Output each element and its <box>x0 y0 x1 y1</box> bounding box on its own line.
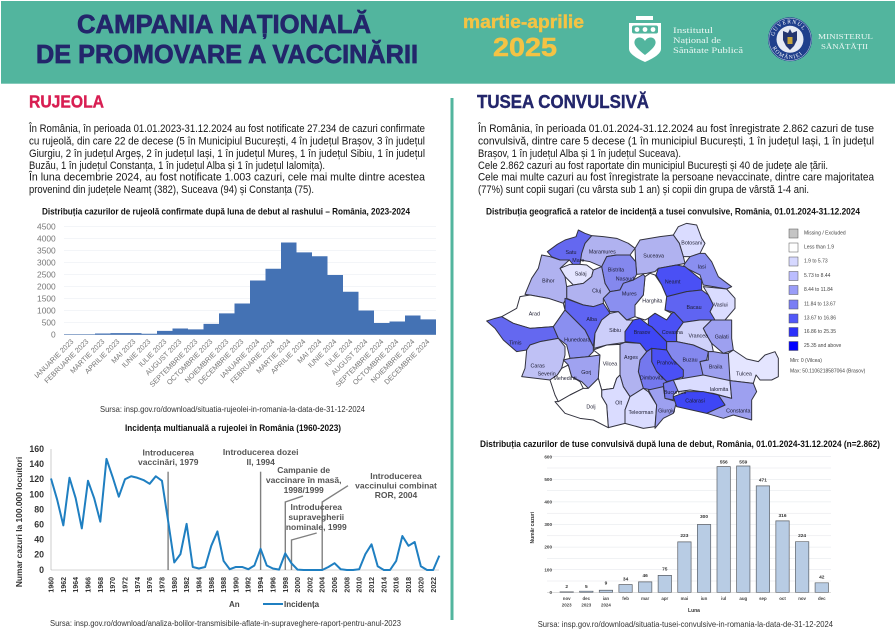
area chart: monthly measles cases: OCTOMBRIE 2024 <box>351 337 400 387</box>
line chart: multiannual incidence: 1970 <box>110 577 117 593</box>
choropleth map of Romania: Dolj <box>586 404 596 410</box>
line chart: multiannual incidence: 2000 <box>295 577 302 593</box>
logo: Institutul Național de Sănătate Publică: Sănătate Publică <box>673 46 744 55</box>
source: line chart: Sursa: insp.gov.ro/download/analiza-bolilor-transmisibile-aflate-in-supraveghere-raport-pentru-anul-2023 <box>50 618 401 628</box>
line chart: multiannual incidence <box>14 444 439 609</box>
area chart: monthly measles cases: 500 <box>42 318 56 328</box>
annotations <box>138 447 437 532</box>
choropleth map of Romania: Giurgiu <box>658 408 675 414</box>
annotations: 1998/1999 <box>284 485 324 495</box>
line chart: multiannual incidence: 1960 <box>48 577 56 593</box>
text block: rujeola: cu rujeolă, din care 22 de decese (5 în Municipiul București, 4 în județul Brașov, 3 în județul <box>29 136 425 148</box>
annotations: vaccinului combinat <box>355 480 437 490</box>
map legend: 1.9 to 5.73 <box>804 258 828 264</box>
line chart: multiannual incidence: 100 <box>29 489 44 499</box>
text block: tusea convulsivă <box>477 122 875 196</box>
bar chart: whooping cough by month: 559 <box>739 460 748 466</box>
logo: Ministerul Sănătății: SĂNĂTĂȚII <box>821 42 869 52</box>
line chart: multiannual incidence: 1976 <box>147 577 154 593</box>
bar chart: whooping cough by month: Luna <box>688 608 700 614</box>
line chart: multiannual incidence: 120 <box>29 474 44 484</box>
area chart: monthly measles cases: AUGUST 2023 <box>143 337 183 377</box>
area chart: monthly measles cases: FEBRUARIE 2024 <box>228 337 276 385</box>
bar chart: whooping cough by month: 5 <box>585 584 588 590</box>
text block: rujeola: Buzău, 1 în județul Constanța, 1 în județul Alba și 1 în județul Ialomița). <box>29 160 325 172</box>
area chart: monthly measles cases: IANUARIE 2023 <box>32 337 75 380</box>
line chart: multiannual incidence: 1986 <box>209 577 216 593</box>
text block: rujeola: Giurgiu, 2 în județul Argeș, 2 în județul Iași, 1 în județul Mureș, 1 în județul Sibiu, 1 în județul <box>29 148 425 160</box>
bar chart: whooping cough by month: 2023 <box>562 603 572 608</box>
choropleth map of Romania: Vilcea <box>603 362 617 368</box>
area chart: monthly measles cases: IULIE 2024 <box>323 337 354 369</box>
bar chart: whooping cough by month: 300 <box>544 522 552 527</box>
choropleth map of Romania: Salaj <box>575 272 587 278</box>
title <box>36 9 418 69</box>
bar chart: whooping cough by month: 200 <box>544 545 552 550</box>
line chart: multiannual incidence: 1980 <box>172 577 179 593</box>
text block: rujeola: provenind din județele Neamț (382), Suceava (94) și Constanța (75). <box>29 184 314 196</box>
choropleth map of Romania: Covasna <box>662 330 683 336</box>
bar chart: whooping cough by month <box>530 454 831 614</box>
bar chart: whooping cough by month: 556 <box>720 460 728 466</box>
title: DE PROMOVARE A VACCINĂRII <box>36 39 418 69</box>
map legend <box>789 229 866 374</box>
bar chart: whooping cough by month: iul <box>721 596 726 601</box>
bar chart: whooping cough by month: 300 <box>700 514 708 520</box>
map legend: 13.67 to 16.86 <box>804 316 836 322</box>
bar chart: whooping cough by month: iun <box>701 596 708 601</box>
line chart: multiannual incidence: 2020 <box>418 577 426 593</box>
area chart: monthly measles cases: 1000 <box>37 306 56 316</box>
bar chart: whooping cough by month: mar <box>641 596 650 601</box>
text block: tusea convulsivă: În România, în perioada 01.01.2024-31.12.2024 au fost înregistrate 2.862 cazuri de tuse <box>477 122 874 135</box>
line chart: multiannual incidence: 2008 <box>344 577 352 593</box>
heading: rujeola: RUJEOLA <box>29 91 104 111</box>
choropleth map of Romania: Bucuresti <box>664 390 686 396</box>
choropleth map of Romania: Brasov <box>634 330 651 336</box>
bar chart: whooping cough by month: 46 <box>643 573 648 579</box>
choropleth map of Romania: Cluj <box>592 288 601 294</box>
area chart: monthly measles cases: IANUARIE 2024 <box>218 337 261 380</box>
line chart: multiannual incidence: 1974 <box>135 577 142 593</box>
area chart: monthly measles cases: 4000 <box>37 234 56 244</box>
choropleth map of Romania: Neamt <box>665 279 681 285</box>
title: CAMPANIA NAȚIONALĂ <box>77 9 371 39</box>
line chart: multiannual incidence: 60 <box>34 520 44 530</box>
text block: tusea convulsivă: convulsivă, dintre care 5 decese (1 în municipiul București, 1 în județul Iași, 1 în județul <box>478 136 874 148</box>
annotations: Campanie de <box>277 465 330 475</box>
campaign date <box>463 12 584 62</box>
bar chart: whooping cough by month: 9 <box>605 580 608 586</box>
map legend: 8.44 to 11.84 <box>804 287 833 293</box>
line chart: multiannual incidence: 2022 <box>431 577 438 593</box>
bar chart: whooping cough by month: 600 <box>544 454 552 459</box>
annotations: Introducerea <box>291 502 342 512</box>
logo: Ministerul Sănătății: MINISTERUL <box>818 32 874 41</box>
choropleth map of Romania: Hunedoara <box>564 337 591 343</box>
annotations: Introducerea dozei <box>223 447 298 457</box>
choropleth map of Romania: Teleorman <box>629 410 653 416</box>
choropleth map of Romania: Ialomita <box>710 387 728 393</box>
line chart: multiannual incidence: 2014 <box>382 577 388 593</box>
vertical markers <box>168 472 348 570</box>
choropleth map of Romania: Mare <box>572 258 584 264</box>
choropleth map of Romania: Braila <box>709 364 723 370</box>
area chart: monthly measles cases: 3500 <box>37 246 56 256</box>
logo: Ministerul Sănătății: ROMÂNIEI <box>772 46 802 59</box>
line chart: multiannual incidence: 1966 <box>86 577 92 593</box>
area chart: monthly measles cases: NOIEMBRIE 2024 <box>369 337 416 385</box>
map legend: Min: 0 (Vilcea) <box>790 358 822 364</box>
bar chart: whooping cough by month: 42 <box>819 574 825 580</box>
bar chart: whooping cough by month: aug <box>739 596 748 601</box>
bar chart: whooping cough by month: 2023 <box>581 603 592 608</box>
area chart: monthly measles cases: OCTOMBRIE 2023 <box>165 337 214 387</box>
choropleth map of Romania: Arad <box>529 311 540 317</box>
bar chart: whooping cough by month: ian <box>603 596 609 601</box>
choropleth map of Romania: Dimbovita <box>640 375 664 381</box>
bar chart: whooping cough by month: 500 <box>544 477 552 482</box>
area chart: monthly measles cases: AUGUST 2024 <box>329 337 369 377</box>
area chart: monthly measles cases: IUNIE 2024 <box>306 337 338 370</box>
text block: tusea convulsivă: Brașov, 1 în județul Alba și 1 în județul Suceava). <box>478 148 681 160</box>
map legend: 25.35 and above <box>804 343 841 349</box>
source: monthly chart: Sursa: insp.gov.ro/download/situatia-rujeolei-in-romania-la-data-de-31-12-2024 <box>100 404 365 414</box>
line chart: multiannual incidence: 20 <box>34 550 44 560</box>
area chart: monthly measles cases: SEPTEMBRIE 2024 <box>334 337 385 389</box>
choropleth map of Romania: Botosani <box>681 240 702 246</box>
panel: rujeola <box>14 91 439 628</box>
panel: tusea convulsivă <box>477 91 880 629</box>
bar chart: whooping cough by month: feb <box>622 596 629 601</box>
text block: rujeola: În luna decembrie 2024, au fost notificate 1.003 cazuri, cele mai multe dintre acestea <box>28 170 426 184</box>
area chart: monthly measles cases: DECEMBRIE 2024 <box>382 337 431 386</box>
area chart: monthly measles cases: FEBRUARIE 2023 <box>42 337 90 385</box>
line chart: multiannual incidence: 1972 <box>122 577 130 593</box>
line chart: multiannual incidence: 2018 <box>406 577 413 593</box>
choropleth map of Romania: Galati <box>715 335 729 341</box>
header banner <box>1 1 895 84</box>
choropleth map of Romania: Satu <box>566 250 577 256</box>
area chart: monthly measles cases: MARTIE 2023 <box>68 337 106 375</box>
map legend: 11.84 to 13.67 <box>804 302 836 308</box>
line chart: multiannual incidence: 1994 <box>258 577 265 593</box>
annotations: supravegherii <box>288 512 344 522</box>
bar chart: whooping cough by month: 223 <box>680 533 689 539</box>
choropleth map of Romania: Bihor <box>542 278 555 284</box>
bar chart: whooping cough by month: 75 <box>662 566 668 572</box>
line chart: multiannual incidence: 1964 <box>73 577 80 593</box>
source: bar chart: Sursa: insp.gov.ro/download/situatia-tusei-convulsive-in-romania-la-data-de-31-12-2024 <box>538 619 833 629</box>
logo: Ministerul Sănătății: GUVERNUL <box>771 20 805 36</box>
bar chart: whooping cough by month: dec <box>818 596 826 601</box>
annotations: vaccinare în masă, <box>266 475 342 485</box>
choropleth map of Romania: Gorj <box>581 370 591 376</box>
area chart: monthly measles cases: IUNIE 2023 <box>120 337 152 370</box>
logo: Ministerul Sănătății <box>768 17 874 62</box>
choropleth map of Romania: Tulcea <box>736 371 752 377</box>
choropleth map of Romania: Buzau <box>682 358 698 364</box>
text block: tusea convulsivă: Cele 2.862 cazuri au fost raportate din municipiul București și 40 de județe ale țării. <box>478 160 828 172</box>
bar chart: whooping cough by month: 316 <box>778 513 787 519</box>
map legend: Max: 50.1106218587064 (Brasov) <box>790 368 866 374</box>
bar chart: whooping cough by month: nov <box>563 596 571 601</box>
bar chart: whooping cough by month: 2024 <box>601 603 611 608</box>
area chart: monthly measles cases: 1500 <box>37 294 56 304</box>
choropleth map of Romania: Constanta <box>726 409 751 415</box>
map legend: Missing / Excluded <box>804 230 846 236</box>
area chart: monthly measles cases: 3000 <box>37 258 56 268</box>
heading: tusea convulsivă: TUSEA CONVULSIVĂ <box>477 91 649 112</box>
choropleth map of Romania: Caras <box>531 363 545 369</box>
chart title: monthly measles cases: Distribuția cazurilor de rujeolă confirmate după luna de debut al rashului – România, 2023-2024 <box>42 206 411 216</box>
annotations: II, 1994 <box>247 457 275 467</box>
choropleth map of Romania: Timis <box>509 341 522 347</box>
choropleth map of Romania: Iasi <box>698 264 706 270</box>
area chart: monthly measles cases: 4500 <box>37 222 56 232</box>
line chart: multiannual incidence: 140 <box>29 459 44 469</box>
area chart: monthly measles cases: SEPTEMBRIE 2023 <box>148 337 199 389</box>
map legend: Less than 1.9 <box>804 244 834 250</box>
area chart: monthly measles cases: MAI 2023 <box>109 337 137 365</box>
choropleth map of Romania: Severin <box>538 372 556 378</box>
logo: Institutul Național de Sănătate Publică: Institutul <box>673 26 714 35</box>
bar chart: whooping cough by month: 224 <box>798 533 806 539</box>
area chart: monthly measles cases: DECEMBRIE 2023 <box>196 337 245 386</box>
bar chart: whooping cough by month: 2 <box>565 584 568 590</box>
choropleth map of Romania: Olt <box>615 400 623 406</box>
choropleth map of Romania: Sibiu <box>609 328 621 334</box>
area chart: monthly measles cases: IULIE 2023 <box>137 337 168 369</box>
choropleth map of Romania <box>487 223 778 428</box>
choropleth map of Romania: Maramures <box>589 249 616 255</box>
legend: line chart <box>229 600 320 609</box>
line chart: multiannual incidence: 1996 <box>270 577 278 593</box>
line chart: multiannual incidence: 2016 <box>394 577 401 593</box>
line chart: multiannual incidence: 1998 <box>283 577 290 593</box>
line chart: multiannual incidence: 80 <box>34 504 44 514</box>
choropleth map of Romania: Alba <box>586 317 597 323</box>
campaign date: martie-aprilie <box>463 12 584 32</box>
area chart: monthly measles cases: MARTIE 2024 <box>254 337 292 375</box>
bar chart: whooping cough by month: mai <box>681 596 688 601</box>
choropleth map of Romania: Vaslui <box>714 302 728 308</box>
bar chart: whooping cough by month: 34 <box>623 576 629 582</box>
area chart: monthly measles cases: MAI 2024 <box>295 337 323 365</box>
line chart: multiannual incidence: 1992 <box>246 577 253 593</box>
line chart: multiannual incidence: 2004 <box>320 577 327 593</box>
choropleth map of Romania: Bacau <box>686 305 702 311</box>
chart title: multiannual incidence: Incidența multianuală a rujeolei în România (1960-2023) <box>125 422 341 433</box>
text block: tusea convulsivă: (77%) sunt copii sugari (cu vârsta sub 1 an) și copii din grupa de vârstă 1-4 ani. <box>478 184 809 196</box>
text block: rujeola <box>28 122 426 196</box>
choropleth map of Romania: Bistrita <box>608 268 624 274</box>
choropleth map of Romania: Prahova <box>657 360 677 366</box>
bar chart: whooping cough by month: 100 <box>544 567 552 572</box>
line chart: multiannual incidence: 160 <box>29 444 44 454</box>
area chart: monthly measles cases: APRILIE 2023 <box>83 337 121 376</box>
bar chart: whooping cough by month: apr <box>661 596 669 601</box>
annotations: Introducerea <box>143 448 194 458</box>
line chart: multiannual incidence: 40 <box>34 535 44 545</box>
annotations: ROR, 2004 <box>375 490 418 500</box>
bar chart: whooping cough by month: nov <box>798 596 807 601</box>
legend: line chart: An <box>229 600 240 609</box>
line chart: multiannual incidence: 1988 <box>221 577 228 593</box>
logo: Institutul Național de Sănătate Publică <box>629 16 744 62</box>
choropleth map of Romania: Suceava <box>643 254 664 260</box>
line chart: multiannual incidence: 0 <box>39 565 44 575</box>
choropleth map of Romania: Arges <box>624 355 638 361</box>
choropleth map of Romania: Mures <box>622 292 637 298</box>
annotations: Introducerea <box>370 471 422 481</box>
line chart: multiannual incidence: 1968 <box>98 577 105 593</box>
area chart: monthly measles cases: 2500 <box>37 270 56 280</box>
bar chart: whooping cough by month: oct <box>779 596 786 601</box>
choropleth map of Romania: Mehedinti <box>553 376 577 382</box>
choropleth map of Romania: Calarasi <box>685 398 705 404</box>
choropleth map of Romania: Harghita <box>642 299 662 305</box>
area chart: monthly measles cases <box>32 222 436 389</box>
map legend: 16.86 to 25.35 <box>804 329 836 335</box>
map legend: 5.73 to 8.44 <box>804 273 831 279</box>
legend: line chart: Incidența <box>284 600 320 609</box>
divider <box>450 98 454 620</box>
area chart: monthly measles cases: 0 <box>51 330 56 340</box>
line chart: multiannual incidence: Numar cazuri la 100.000 locuitori <box>14 457 24 587</box>
bar chart: whooping cough by month: 400 <box>544 500 552 504</box>
line chart: multiannual incidence: 2002 <box>308 577 314 593</box>
bar chart: whooping cough by month: Număr cazuri <box>530 511 536 544</box>
bar chart: whooping cough by month: 0 <box>549 590 552 595</box>
text block: rujeola: În România, în perioada 01.01.2023-31.12.2024 au fost notificate 27.234 de cazuri confirmate <box>28 122 425 135</box>
line chart: multiannual incidence: 1982 <box>184 577 191 593</box>
line chart: multiannual incidence: 1984 <box>196 577 204 593</box>
annotations: nominale, 1999 <box>286 522 347 532</box>
line chart: multiannual incidence: 1978 <box>160 577 166 593</box>
bar chart: whooping cough by month: dec <box>583 596 591 601</box>
line chart: multiannual incidence: 2006 <box>332 577 339 593</box>
campaign date: 2025 <box>493 32 557 62</box>
annotations: vaccinări, 1979 <box>138 457 199 467</box>
logo: Institutul Național de Sănătate Publică: Național de <box>673 36 722 45</box>
line chart: multiannual incidence: 1990 <box>234 577 240 593</box>
bar chart: whooping cough by month: sep <box>759 596 767 601</box>
area chart: monthly measles cases: NOIEMBRIE 2023 <box>183 337 230 385</box>
line chart: multiannual incidence: 2012 <box>369 577 376 593</box>
choropleth map of Romania: Vrancea <box>689 333 708 339</box>
area chart: monthly measles cases: APRILIE 2024 <box>269 337 307 376</box>
line chart: multiannual incidence: 2010 <box>357 577 364 593</box>
line chart: multiannual incidence: 1962 <box>61 577 68 593</box>
choropleth map of Romania: Nasaud <box>616 277 634 283</box>
bar chart: whooping cough by month: 471 <box>759 478 767 484</box>
area chart: monthly measles cases: 2000 <box>37 282 56 292</box>
